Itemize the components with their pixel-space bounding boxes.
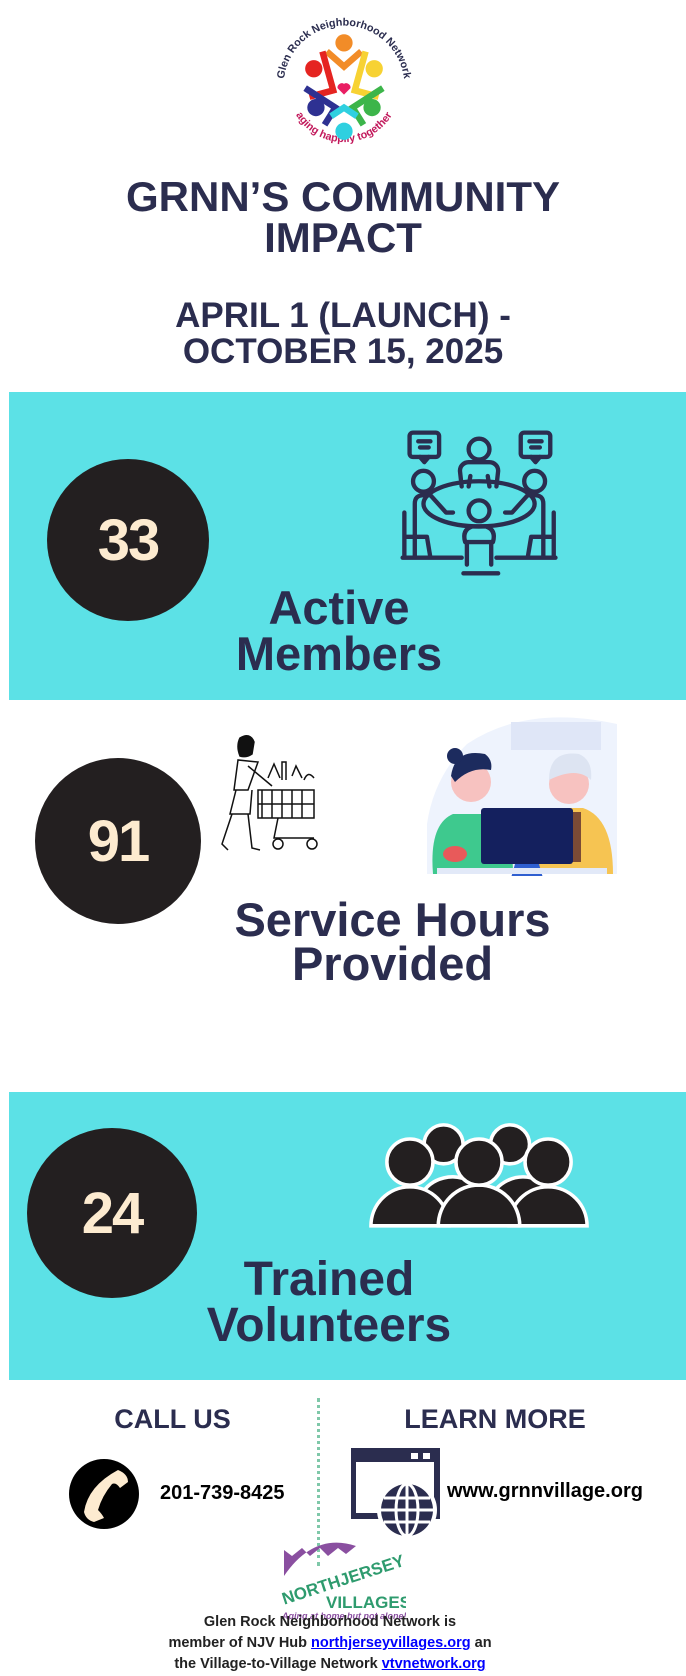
icon: phone xyxy=(69,1459,139,1529)
panel: active members xyxy=(9,392,686,700)
icon: woman with shopping cart xyxy=(221,735,318,851)
footer text: member of NJV Hub northjerseyvillages.org an xyxy=(168,1635,492,1651)
title: IMPACT xyxy=(264,214,422,261)
heading: call us: CALL US xyxy=(114,1404,231,1434)
icon: web globe xyxy=(351,1448,440,1536)
subtitle: date range: APRIL 1 (LAUNCH) - xyxy=(175,296,511,335)
footer text xyxy=(168,1614,492,1672)
label: Trained Volunteers: Volunteers xyxy=(207,1299,451,1352)
label: Service Hours Provided: Provided xyxy=(292,937,493,990)
subtitle: date range xyxy=(175,296,511,371)
panel: service hours xyxy=(35,718,617,990)
stat circle: 91 xyxy=(35,758,201,924)
logo: North Jersey Villages: NORTHJERSEY xyxy=(280,1551,406,1609)
logo: Glen Rock Neighborhood Network xyxy=(277,18,412,79)
label: Service Hours Provided xyxy=(234,893,551,990)
icon: group of people xyxy=(369,1123,589,1228)
label: Active Members: Members xyxy=(236,627,442,680)
stat circle: 33 xyxy=(47,459,209,621)
icon: meeting table xyxy=(400,430,558,576)
stat circle: 33: 33 xyxy=(98,508,158,572)
footer text: the Village-to-Village Network vtvnetwork.org xyxy=(174,1656,486,1672)
label: Active Members xyxy=(236,581,442,680)
label: Service Hours Provided: Service Hours xyxy=(234,893,551,946)
logo: aging happily together xyxy=(296,112,391,144)
panel: trained volunteers xyxy=(9,1092,686,1380)
label: Active Members: Active xyxy=(268,581,410,634)
stat circle: 24 xyxy=(27,1128,197,1298)
logo xyxy=(277,18,412,144)
footer text: Glen Rock Neighborhood Network is xyxy=(204,1614,456,1630)
divider dotted xyxy=(317,1398,320,1566)
title: GRNN’S COMMUNITY xyxy=(126,173,560,220)
phone number: 201-739-8425 xyxy=(160,1482,285,1504)
website url: www.grnnvillage.org xyxy=(447,1480,643,1502)
illustration: volunteer helping senior at computer xyxy=(427,718,617,876)
stat circle: 24: 24 xyxy=(82,1180,142,1246)
title xyxy=(126,173,560,261)
heading: learn more: LEARN MORE xyxy=(404,1404,586,1434)
label: Trained Volunteers xyxy=(207,1253,451,1352)
label: Trained Volunteers: Trained xyxy=(244,1253,414,1306)
subtitle: date range: OCTOBER 15, 2025 xyxy=(183,332,503,371)
stat circle: 91: 91 xyxy=(88,808,148,874)
